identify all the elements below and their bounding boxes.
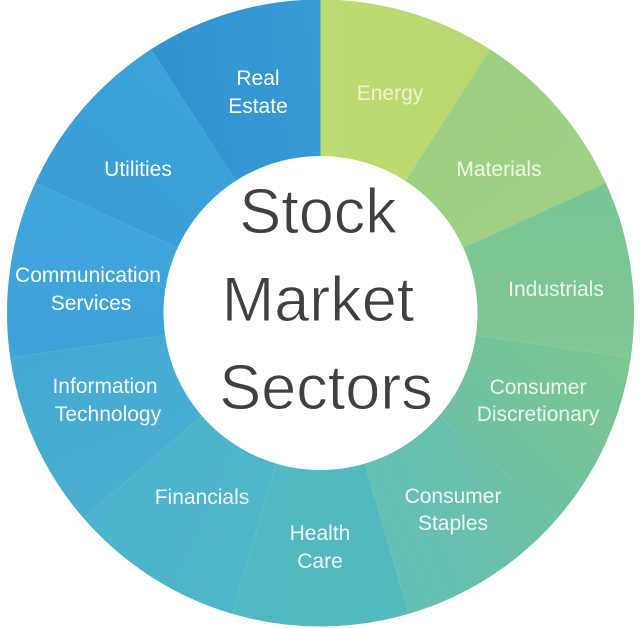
sector: Health Care bbox=[232, 313, 409, 626]
label: Communication Services: Services bbox=[51, 292, 131, 315]
sector: Energy bbox=[320, 0, 490, 313]
label: Real Estate: Estate bbox=[228, 95, 288, 118]
sector: Industrials bbox=[320, 183, 634, 358]
sector: Communication Services bbox=[7, 183, 321, 358]
title bbox=[219, 177, 433, 423]
label: Health Care: Care bbox=[297, 550, 343, 573]
label: Communication Services: Communication bbox=[15, 264, 161, 287]
sector: Utilities bbox=[35, 49, 321, 313]
label: Consumer Discretionary: Consumer bbox=[490, 376, 586, 399]
title: Stock bbox=[239, 177, 397, 247]
title: Sectors bbox=[219, 353, 433, 423]
sector: Materials bbox=[320, 49, 606, 313]
label: Utilities: Utilities bbox=[104, 158, 172, 181]
label: Information Technology: Technology bbox=[55, 403, 162, 426]
label: Consumer Discretionary: Discretionary bbox=[477, 403, 600, 426]
label: Consumer Staples: Staples bbox=[418, 512, 488, 535]
center circle bbox=[164, 156, 478, 470]
title: Market bbox=[222, 265, 415, 335]
label: Real Estate: Real bbox=[236, 67, 280, 90]
label: Financials: Financials bbox=[155, 486, 249, 509]
label: Consumer Staples: Consumer bbox=[405, 485, 501, 508]
label: Industrials: Industrials bbox=[508, 278, 604, 301]
sector: Consumer Staples bbox=[320, 313, 557, 614]
label: Materials: Materials bbox=[456, 158, 542, 181]
label: Energy: Energy bbox=[357, 82, 424, 105]
label: Health Care: Health bbox=[290, 522, 350, 545]
sector: Consumer Discretionary bbox=[320, 313, 631, 518]
sector: Information Technology bbox=[10, 313, 320, 518]
label: Information Technology: Information bbox=[52, 375, 158, 398]
sector: Real Estate bbox=[151, 0, 320, 313]
sector: Financials bbox=[84, 313, 320, 614]
